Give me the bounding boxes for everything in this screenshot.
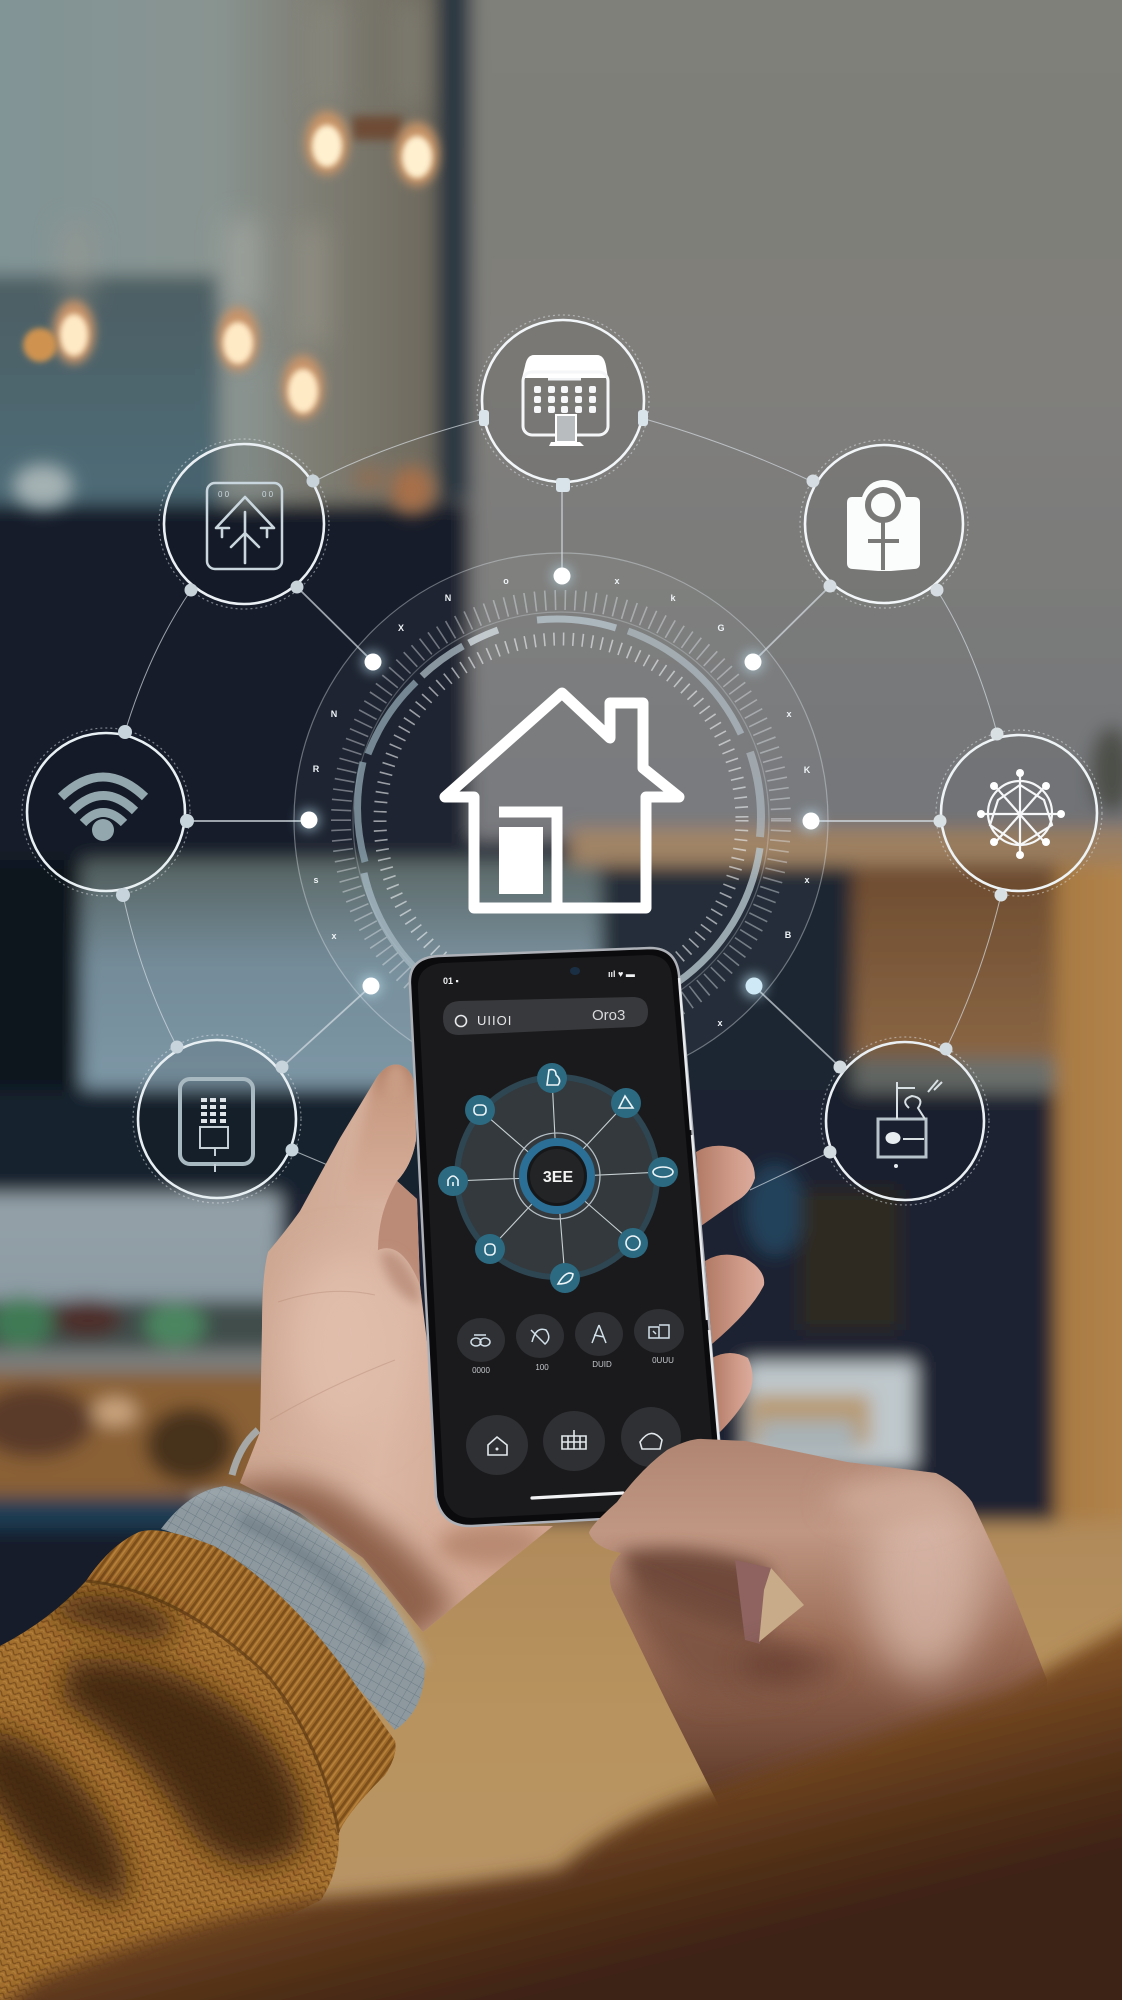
wooden tray band: [0, 1372, 280, 1497]
wooden counter: [570, 828, 1122, 865]
small ring glyphs: X: [398, 623, 404, 633]
right hand: [589, 1439, 1047, 1810]
gauge nodes: [298, 566, 822, 998]
app buttons row: DUID: [592, 1360, 612, 1369]
app buttons row: 0000: [472, 1366, 490, 1375]
search bar: Oro3: [592, 1007, 625, 1024]
phone screen: [418, 955, 716, 1518]
search bar: UIIOI: [477, 1013, 512, 1028]
foliage band: [0, 1300, 280, 1352]
upper left window wall: [0, 0, 440, 510]
small ring glyphs: x: [786, 709, 792, 719]
small ring glyphs: k: [670, 593, 676, 603]
small ring glyphs: G: [717, 623, 725, 633]
small ring glyphs: K: [804, 765, 811, 775]
small ring glyphs: B: [785, 930, 792, 940]
teal block: [0, 275, 220, 505]
phone body: [410, 948, 721, 1526]
plant at right: [1090, 726, 1122, 814]
app buttons row: 0UUU: [652, 1356, 674, 1365]
table: [280, 1522, 1122, 2000]
status bar: [443, 969, 635, 986]
small ring glyphs: x: [331, 931, 337, 941]
palm and thumb: [240, 1064, 553, 1632]
app buttons row: [457, 1309, 684, 1375]
house icon: [445, 693, 679, 908]
bright window panel: [82, 860, 602, 1088]
brick wall: [450, 0, 1122, 840]
shelf and dark wall: [0, 503, 470, 863]
app buttons row: 100: [535, 1363, 549, 1372]
grey blue band: [0, 1194, 280, 1304]
knit sleeve: [0, 1486, 425, 2000]
inner tick ring: [380, 639, 742, 1001]
radial control wheel: [438, 1063, 678, 1293]
device node: tree tablet: 0 0: [262, 490, 274, 499]
central gauge: [294, 553, 828, 1087]
device node: tablet keypad: [133, 1035, 301, 1203]
status bar: 01 ▪: [443, 976, 459, 986]
bottom shortcut buttons: [466, 1407, 681, 1475]
dark band below panel: [0, 1090, 600, 1194]
home indicator: [532, 1493, 623, 1498]
small ring glyphs: [313, 576, 811, 1028]
pendant lamps: [13, 0, 439, 514]
device node: tree tablet: 0 0: [218, 490, 230, 499]
grey cuff: [161, 1486, 425, 1730]
device node: tree tablet: [159, 439, 329, 609]
left hand: [220, 1060, 764, 1650]
arc segments: [358, 619, 761, 982]
wood cabinet: [853, 864, 1063, 1059]
watch band sliver: [232, 1430, 258, 1475]
small ring glyphs: s: [313, 875, 319, 885]
blurred foreground shoulder: [0, 1600, 1122, 2000]
fingers behind phone: [696, 1146, 764, 1433]
outer tick ring: [341, 600, 781, 1040]
ribbed band: [86, 1530, 396, 1833]
small ring glyphs: R: [313, 764, 320, 774]
radial control wheel: 3EE: [543, 1169, 573, 1186]
device node: female symbol lock: [800, 440, 968, 608]
camera pill: [570, 967, 580, 975]
black left side: [0, 860, 80, 1150]
outer ring: [294, 553, 828, 1087]
knit shadows: [0, 1596, 304, 1905]
smartphone: [410, 948, 721, 1526]
gap between fingers: [759, 1568, 804, 1642]
device node: network globe: [934, 728, 1102, 902]
small ring glyphs: x: [717, 1018, 723, 1028]
small ring glyphs: o: [503, 576, 509, 586]
small ring glyphs: x: [804, 875, 810, 885]
small ring glyphs: N: [445, 593, 451, 603]
device node: lock panel: [821, 1037, 989, 1205]
wood column: [1056, 864, 1122, 1524]
status bar: ııl ♥ ▬: [608, 969, 635, 979]
dark column: [437, 0, 471, 500]
sweater body: [0, 1530, 396, 2000]
device node: calendar monitor: [477, 315, 649, 492]
right lower dark area: [600, 864, 860, 1094]
small ring glyphs: x: [614, 576, 620, 586]
connector network: [123, 419, 1001, 1190]
search bar: [443, 997, 648, 1035]
device node: wifi: [22, 725, 194, 902]
small ring glyphs: N: [331, 709, 337, 719]
edge highlight: [679, 978, 719, 1445]
